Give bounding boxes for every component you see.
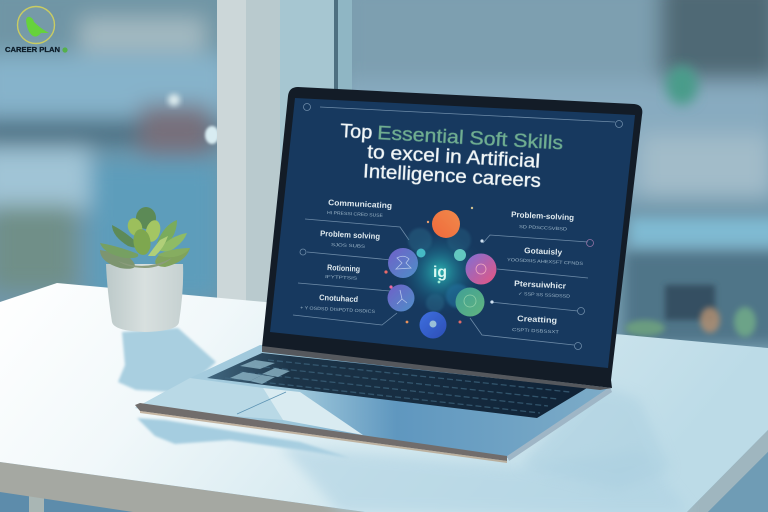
right skill labels: ✓ SSP SS SSSDSSD [518,291,571,299]
keyboard deck [135,345,612,463]
title: Intelligence careers [363,160,542,192]
right skill labels: Gotauisly [524,246,563,257]
orb: purple left bottom [388,284,414,312]
connector lines and nodes [293,104,622,350]
title: Essential Soft Skills [377,122,564,154]
orb: purple left top [388,248,418,278]
left skill labels: SJOS SUBS [331,242,365,249]
accent dots [384,207,494,324]
right skill labels: Creatting [517,314,557,325]
left skill labels: Rotioning [327,263,360,274]
icon: green bird [26,17,49,37]
left skill labels: IFYTPTSIS [325,274,357,281]
title [338,120,564,193]
right skill labels [507,210,583,334]
left skill labels: + Y OSDSD DISPDTD OSDICS [300,305,375,314]
left skill labels: HI PRESSI CRED SUSE [327,210,383,218]
orb: blue [420,312,446,338]
window frame [217,0,352,305]
leaves [100,207,190,269]
orb: green [456,288,484,316]
central AI hub: ig [433,264,447,281]
right view [340,0,768,200]
right skill labels: Problem-solving [511,210,574,222]
right skill labels: Ptersuiwhicr [514,279,566,291]
left skill labels: Cnotuhacd [319,293,358,304]
skill orbs [388,210,496,338]
shadows on table [118,328,690,512]
laptop [135,87,642,463]
lid [262,87,642,388]
left skill labels [300,198,392,314]
succulent plant in pot [100,207,190,332]
logo: Career Plan [5,6,68,54]
screen [270,98,635,368]
title: to excel in Artificial [367,141,541,173]
central AI hub [396,228,484,316]
left skill labels: Communicating [328,198,392,210]
right skill labels: SD PDSCCSVBSD [519,224,568,232]
title: Top [340,120,373,144]
orb: magenta right [466,254,496,284]
logo: Career Plan: CAREER PLAN [5,45,60,54]
table [0,283,768,512]
pot [106,264,183,332]
keyboard [207,353,587,418]
right skill labels: CSPTI DSBSSXT [512,327,559,334]
left skill labels: Problem solving [320,229,380,241]
right skill labels: YOOSDSIS AHEXSFT CFNDS [507,257,583,266]
orb: orange [432,210,460,238]
